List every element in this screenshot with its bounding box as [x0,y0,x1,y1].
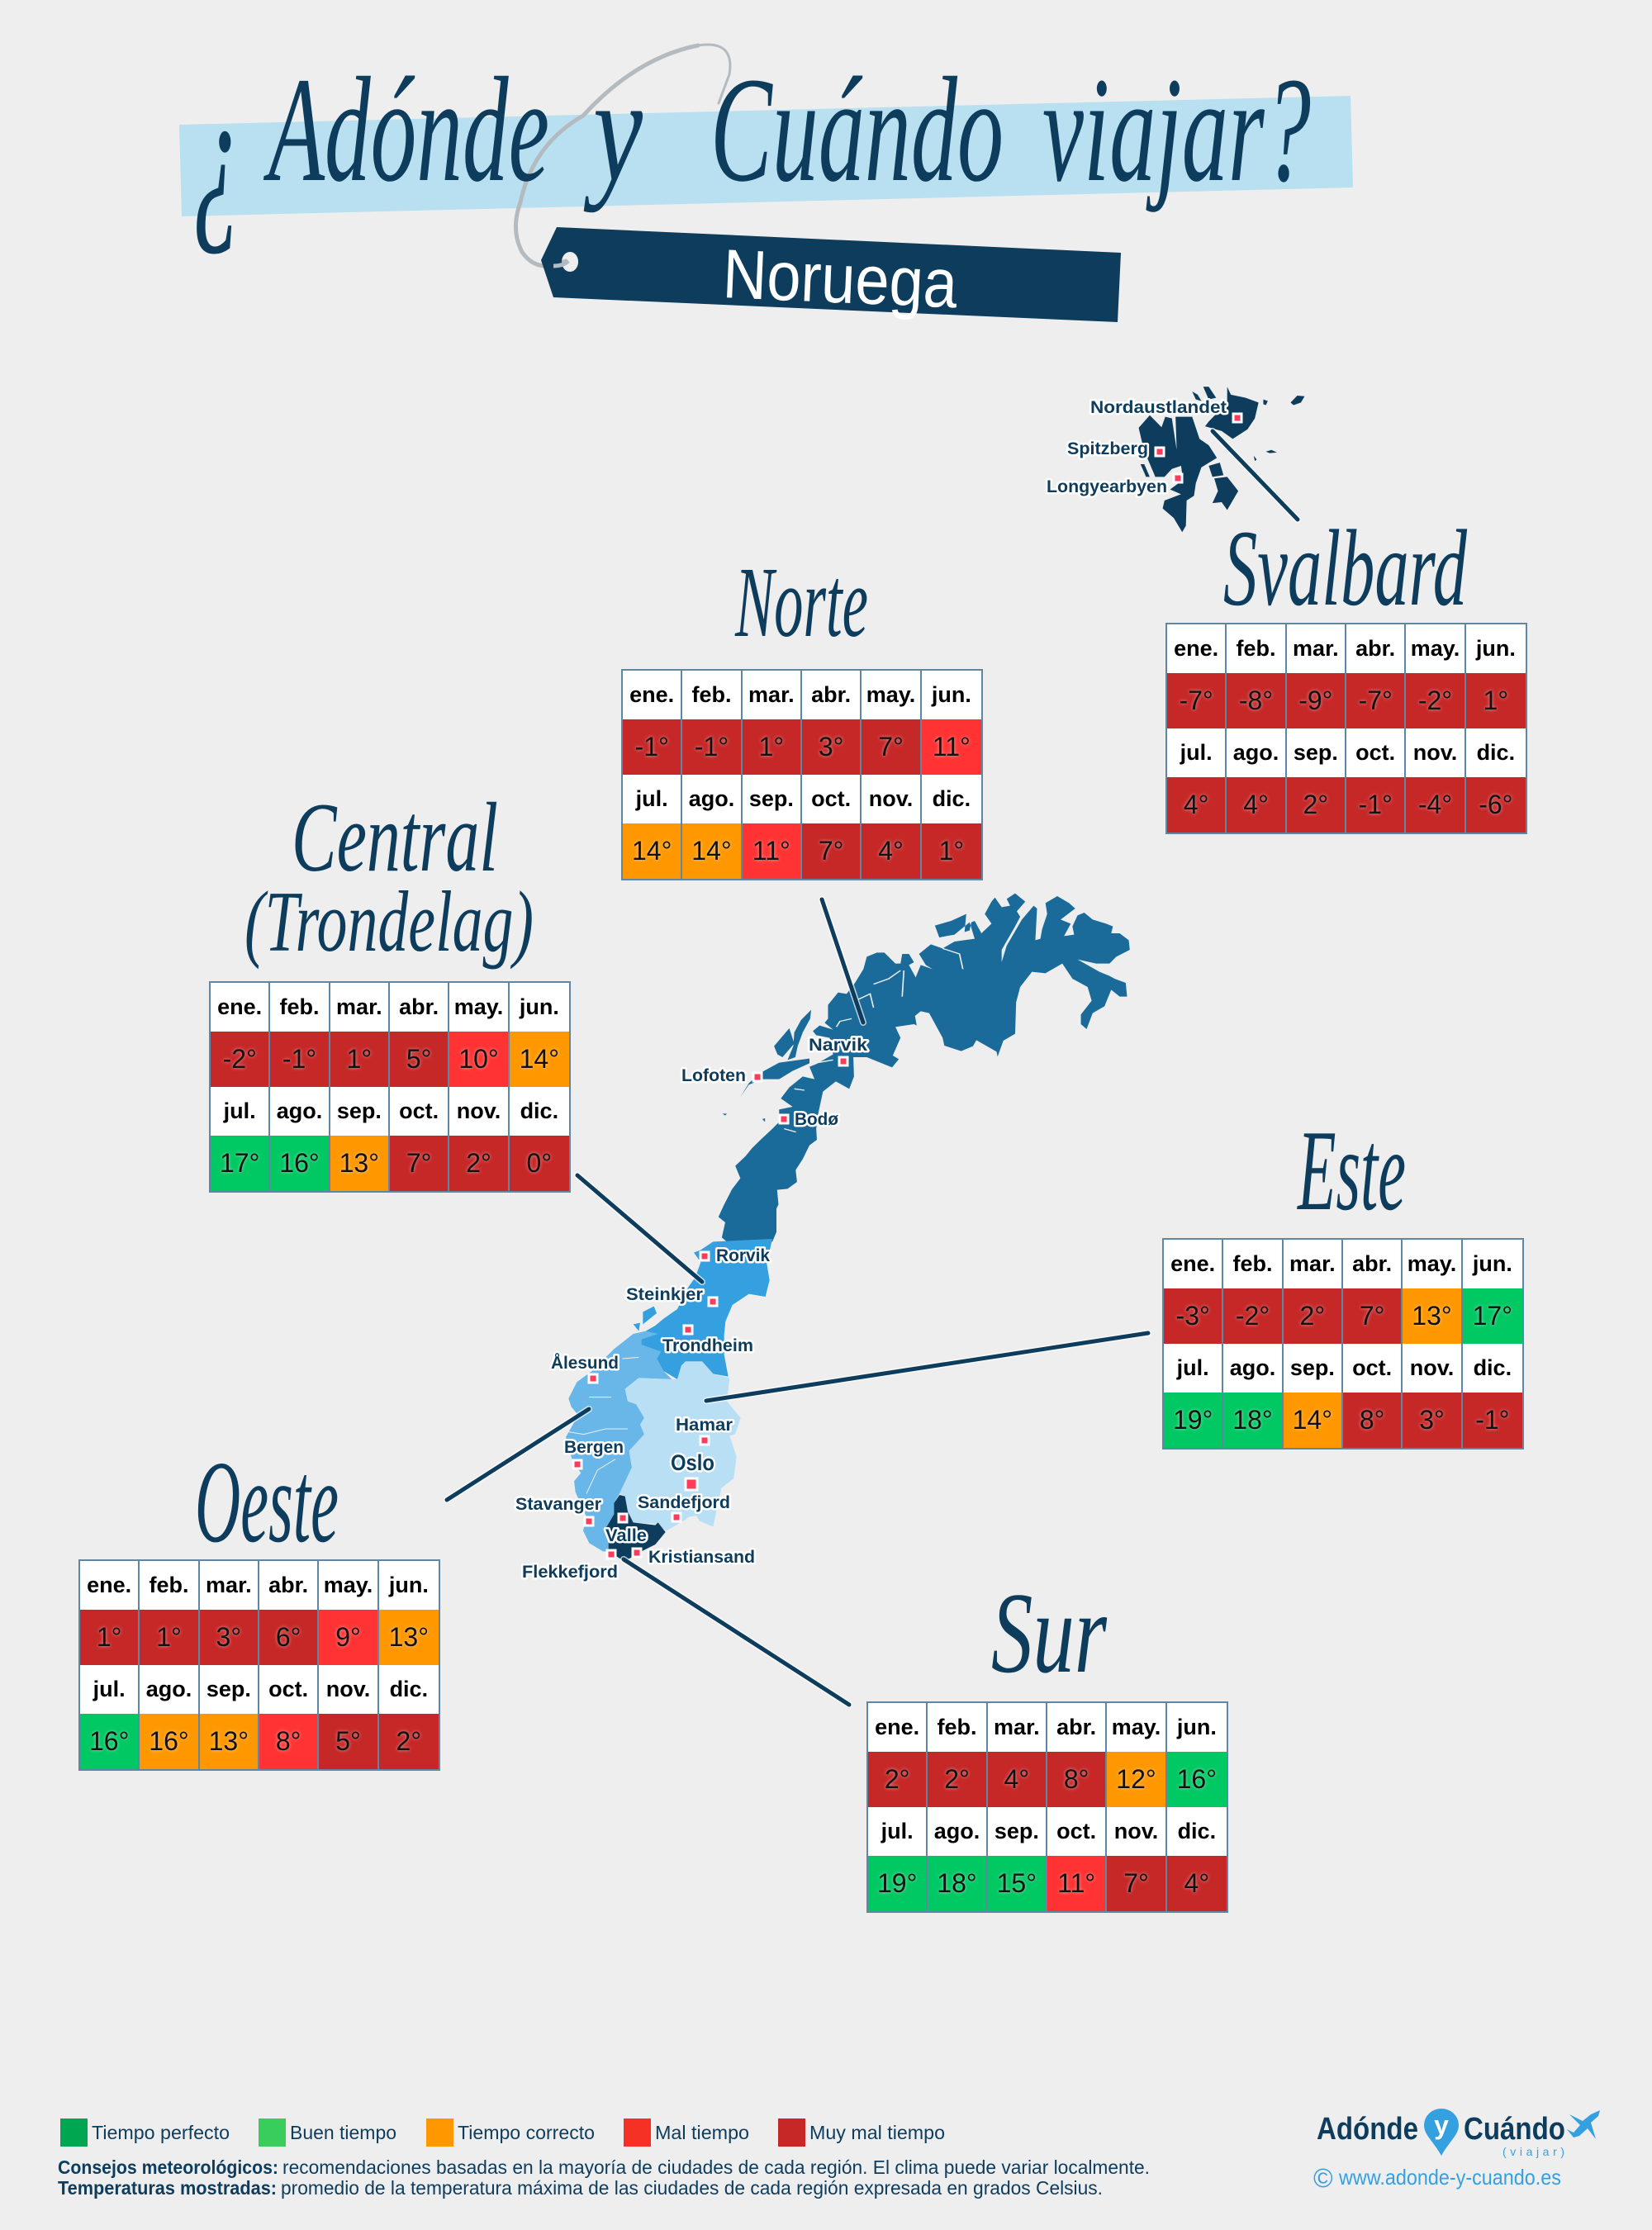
city labels [515,398,1227,1582]
months jul-dic: dic. [933,786,971,811]
temperatures ene-jun: 10° [458,1044,499,1074]
temperatures jul-dic: 5° [335,1726,361,1756]
logo: © [1313,2163,1333,2193]
months ene-jun: ene. [1174,636,1218,661]
months ene-jun: feb. [279,994,319,1019]
months jul-dic: ago. [146,1677,192,1701]
temperatures jul-dic: 15° [997,1868,1037,1898]
temperatures jul-dic [868,1856,1227,1911]
temperatures jul-dic: -6° [1479,790,1512,819]
legend: Tiempo correcto [458,2122,595,2143]
months ene-jun: abr. [399,994,439,1019]
months ene-jun: ene. [629,682,674,707]
months ene-jun: mar. [336,994,382,1019]
temperatures ene-jun: 7° [1360,1301,1384,1331]
city labels: Nordaustlandet [1090,398,1227,417]
temperatures ene-jun [1164,1288,1522,1344]
logo [1313,2109,1600,2193]
months jul-dic: sep. [1294,740,1338,765]
temperatures jul-dic: 16° [149,1726,189,1756]
city labels: Kristiansand [648,1548,755,1567]
temperatures ene-jun: 12° [1116,1764,1156,1794]
temperatures jul-dic: 8° [1360,1405,1384,1435]
months ene-jun [623,671,981,719]
months ene-jun: mar. [206,1573,252,1597]
map: Norte region [719,894,1130,1247]
city labels: Steinkjer [626,1285,703,1304]
months ene-jun: abr. [1355,636,1395,661]
temperatures ene-jun: -2° [223,1044,257,1074]
temperatures ene-jun: 3° [819,732,843,762]
temperatures ene-jun: 1° [759,732,784,762]
temperatures ene-jun: 3° [216,1622,241,1652]
months jul-dic: oct. [811,786,851,811]
months ene-jun: feb. [149,1573,188,1597]
months jul-dic: sep. [995,1819,1039,1843]
temperatures ene-jun: -3° [1176,1301,1210,1331]
months ene-jun [211,983,569,1032]
months ene-jun [1167,624,1526,673]
table: Oeste [78,1559,440,1771]
months ene-jun: mar. [1293,636,1339,661]
months jul-dic: sep. [749,786,794,811]
temperatures jul-dic: 19° [1173,1405,1213,1435]
temperatures ene-jun: 8° [1064,1764,1089,1794]
temperatures ene-jun: 17° [1473,1301,1512,1331]
temperatures jul-dic: 14° [632,836,672,866]
months ene-jun [1164,1240,1522,1288]
months ene-jun: ene. [217,994,262,1019]
logo: (viajar) [1502,2145,1564,2158]
temperatures jul-dic: -1° [1475,1405,1509,1435]
months ene-jun: feb. [1232,1251,1272,1276]
temperatures ene-jun: 2° [885,1764,909,1794]
months ene-jun: jun. [520,994,559,1019]
months jul-dic: oct. [268,1677,308,1701]
months jul-dic: jul. [224,1098,256,1123]
months ene-jun: mar. [748,682,795,707]
temperatures ene-jun: -1° [635,732,669,762]
temperatures ene-jun: -1° [695,732,729,762]
table: Sur [866,1701,1228,1913]
temperatures jul-dic: 19° [877,1868,917,1898]
months jul-dic: oct. [1056,1819,1096,1843]
months jul-dic: oct. [399,1098,439,1123]
temperatures jul-dic [623,823,981,879]
legend: Mal tiempo [655,2122,749,2143]
months jul-dic: ago. [934,1819,980,1843]
logo: Adónde [1317,2112,1418,2147]
months jul-dic: sep. [337,1098,382,1123]
table: Norte [621,669,983,880]
temperatures jul-dic: -4° [1418,790,1452,819]
temperatures ene-jun: 13° [1412,1301,1452,1331]
city labels: Rorvik [716,1246,770,1265]
months jul-dic: nov. [326,1677,370,1701]
months ene-jun: mar. [1289,1251,1336,1276]
months jul-dic: nov. [1413,740,1457,765]
city labels: Flekkefjord [522,1563,618,1582]
months jul-dic: nov. [457,1098,501,1123]
temperatures ene-jun: 14° [520,1044,559,1074]
months jul-dic [1164,1344,1522,1393]
months ene-jun: mar. [994,1715,1040,1739]
months ene-jun: abr. [268,1573,308,1597]
months jul-dic: jul. [1180,740,1213,765]
months jul-dic: oct. [1355,740,1395,765]
months ene-jun: may. [866,682,915,707]
notes [58,2156,1150,2199]
temperatures jul-dic: 11° [752,836,790,866]
city labels: Bodø [795,1110,838,1129]
temperatures ene-jun: 1° [156,1622,182,1652]
months ene-jun: may. [1408,1251,1456,1276]
tag string [515,45,730,266]
months jul-dic: nov. [1114,1819,1158,1843]
months jul-dic: ago. [1230,1355,1275,1380]
temperatures jul-dic: 14° [1293,1405,1332,1435]
months jul-dic: jul. [636,786,668,811]
temperatures ene-jun: 13° [389,1622,429,1652]
city labels: Stavanger [515,1495,601,1514]
title: Cuándo [710,47,1004,213]
subtitle tag: Noruega: Noruega [721,235,959,322]
heading: Trondelag: (Trondelag) [244,873,534,970]
months jul-dic: jul. [881,1819,914,1843]
temperatures jul-dic: 4° [878,836,904,866]
map: Este region [620,1361,741,1530]
temperatures ene-jun: -7° [1359,686,1393,715]
months ene-jun: abr. [1352,1251,1392,1276]
months ene-jun: jun. [1476,636,1516,661]
months jul-dic: dic. [390,1677,428,1701]
title banner [179,96,1353,216]
temperatures ene-jun: 2° [944,1764,970,1794]
map: Oeste region [566,1331,672,1551]
map: Central (Trondelag) region [634,1239,772,1379]
temperatures jul-dic: 11° [1057,1868,1095,1898]
legend: Muy mal tiempo [809,2122,945,2143]
temperatures ene-jun [211,1032,569,1087]
temperatures ene-jun: -2° [1236,1301,1270,1331]
months jul-dic [868,1807,1227,1856]
months ene-jun: feb. [691,682,732,707]
heading: Svalbard: Svalbard [1223,507,1468,629]
months jul-dic: dic. [520,1098,558,1123]
temperatures ene-jun [868,1752,1227,1807]
months jul-dic [80,1665,439,1714]
months ene-jun: feb. [937,1715,976,1739]
temperatures ene-jun: 1° [1483,686,1508,715]
temperatures ene-jun: 9° [335,1622,361,1652]
temperatures jul-dic: 18° [1232,1405,1273,1435]
temperatures ene-jun: 1° [347,1044,372,1074]
temperatures jul-dic: 3° [1419,1405,1445,1435]
temperatures ene-jun: -7° [1180,686,1213,715]
notes: Temperaturas mostradas: [58,2177,277,2199]
temperatures jul-dic: 7° [819,836,843,866]
months ene-jun: ene. [875,1715,919,1739]
temperatures jul-dic: 13° [209,1726,249,1756]
title: viajar? [1042,47,1311,213]
months ene-jun: jun. [932,682,971,707]
temperatures ene-jun: -9° [1298,686,1332,715]
temperatures jul-dic: 8° [276,1726,301,1756]
temperatures ene-jun: -8° [1239,686,1273,715]
temperatures jul-dic [211,1136,569,1191]
temperatures jul-dic: 7° [1123,1868,1149,1898]
months ene-jun: abr. [811,682,851,707]
legend: Tiempo perfecto [92,2122,230,2143]
temperatures jul-dic: 1° [939,836,964,866]
temperatures jul-dic: 14° [691,836,732,866]
temperatures ene-jun: 4° [1004,1764,1029,1794]
months jul-dic: nov. [869,786,913,811]
temperatures ene-jun [80,1610,439,1665]
heading: Norte: Norte [734,547,868,658]
temperatures jul-dic [1164,1393,1522,1448]
months jul-dic: nov. [1410,1355,1454,1380]
months jul-dic: dic. [1178,1819,1216,1843]
city labels: Bergen [564,1438,624,1457]
city labels: Trondheim [662,1336,753,1355]
months jul-dic: jul. [1177,1355,1209,1380]
temperatures jul-dic: 4° [1243,790,1269,819]
map: Sur region [605,1495,666,1561]
legend [60,2118,945,2147]
temperatures ene-jun: 5° [406,1044,431,1074]
months jul-dic: sep. [1290,1355,1335,1380]
temperatures jul-dic [80,1714,439,1769]
temperatures jul-dic: 2° [396,1726,421,1756]
city markers [573,414,1241,1559]
months jul-dic: dic. [1474,1355,1512,1380]
temperatures jul-dic [1167,777,1526,833]
city labels: Spitzberg [1067,439,1148,458]
connector lines [447,431,1298,1705]
city labels: Lofoten [681,1066,746,1085]
months jul-dic: sep. [206,1677,251,1701]
months jul-dic [623,775,981,823]
temperatures jul-dic: 18° [937,1868,977,1898]
title: Adónde [263,47,549,213]
subtitle tag: Noruega [541,227,1121,322]
months ene-jun: may. [1112,1715,1161,1739]
months ene-jun: feb. [1236,636,1275,661]
logo: www.adonde-y-cuando.es [1338,2165,1561,2190]
temperatures jul-dic: 16° [279,1148,320,1178]
temperatures jul-dic: 0° [527,1148,552,1178]
temperatures ene-jun [1167,673,1526,728]
title: ¿ [192,55,242,256]
notes: recomendaciones basadas en la mayoría de ciudades de cada región. El clima puede variar localmente. [282,2156,1150,2178]
temperatures ene-jun: -2° [1418,686,1452,715]
city labels: Ålesund [551,1353,619,1373]
logo: Cuándo [1464,2112,1565,2147]
months ene-jun: abr. [1056,1715,1096,1739]
months jul-dic: ago. [277,1098,322,1123]
temperatures ene-jun: 6° [276,1622,301,1652]
months jul-dic: oct. [1352,1355,1392,1380]
legend: Buen tiempo [290,2122,396,2143]
temperatures ene-jun: 16° [1177,1764,1217,1794]
temperatures jul-dic: 4° [1184,1868,1209,1898]
months ene-jun [868,1703,1227,1752]
months ene-jun: ene. [1170,1251,1215,1276]
table: Central [209,981,571,1193]
city labels: Oslo [671,1450,714,1475]
temperatures jul-dic: 7° [406,1148,431,1178]
temperatures jul-dic: 13° [339,1148,379,1178]
temperatures jul-dic: 2° [466,1148,491,1178]
title [192,47,1311,256]
city labels: Valle [605,1526,647,1545]
temperatures jul-dic: -1° [1359,790,1393,819]
months jul-dic [1167,728,1526,777]
heading: Sur: Sur [991,1569,1107,1697]
city labels: Narvik [809,1036,867,1055]
temperatures jul-dic: 17° [220,1148,259,1178]
temperatures ene-jun [623,719,981,775]
months ene-jun: ene. [87,1573,131,1597]
months ene-jun: jun. [1473,1251,1512,1276]
months jul-dic: dic. [1477,740,1515,765]
months jul-dic: jul. [93,1677,126,1701]
notes: promedio de la temperatura máxima de las ciudades de cada región expresada en grados Celsius. [281,2177,1103,2199]
temperatures jul-dic: 2° [1303,790,1328,819]
months ene-jun: may. [454,994,503,1019]
months ene-jun: jun. [1177,1715,1217,1739]
logo: y [1434,2110,1449,2140]
temperatures ene-jun: 11° [933,732,971,762]
table: Svalbard [1165,623,1527,834]
months ene-jun: may. [1411,636,1460,661]
temperatures ene-jun: 1° [97,1622,121,1652]
temperatures ene-jun: -1° [282,1044,316,1074]
months ene-jun: may. [324,1573,373,1597]
months ene-jun: jun. [389,1573,429,1597]
city labels: Longyearbyen [1047,477,1167,496]
months jul-dic: ago. [1233,740,1279,765]
notes: Consejos meteorológicos: [58,2156,278,2178]
map: Svalbard [1139,387,1304,532]
title: y [583,47,643,213]
city labels: Sandefjord [638,1493,730,1512]
temperatures jul-dic: 16° [89,1726,129,1756]
months jul-dic: ago. [689,786,734,811]
heading: Oeste: Oeste [195,1436,339,1567]
months jul-dic [211,1087,569,1136]
months ene-jun [80,1561,439,1610]
temperatures ene-jun: 2° [1300,1301,1325,1331]
table: Este [1162,1238,1524,1450]
city labels: Hamar [676,1416,733,1435]
heading: Este: Este [1297,1107,1406,1235]
temperatures ene-jun: 7° [878,732,904,762]
temperatures jul-dic: 4° [1184,790,1208,819]
heading: Central: Central [292,782,498,892]
